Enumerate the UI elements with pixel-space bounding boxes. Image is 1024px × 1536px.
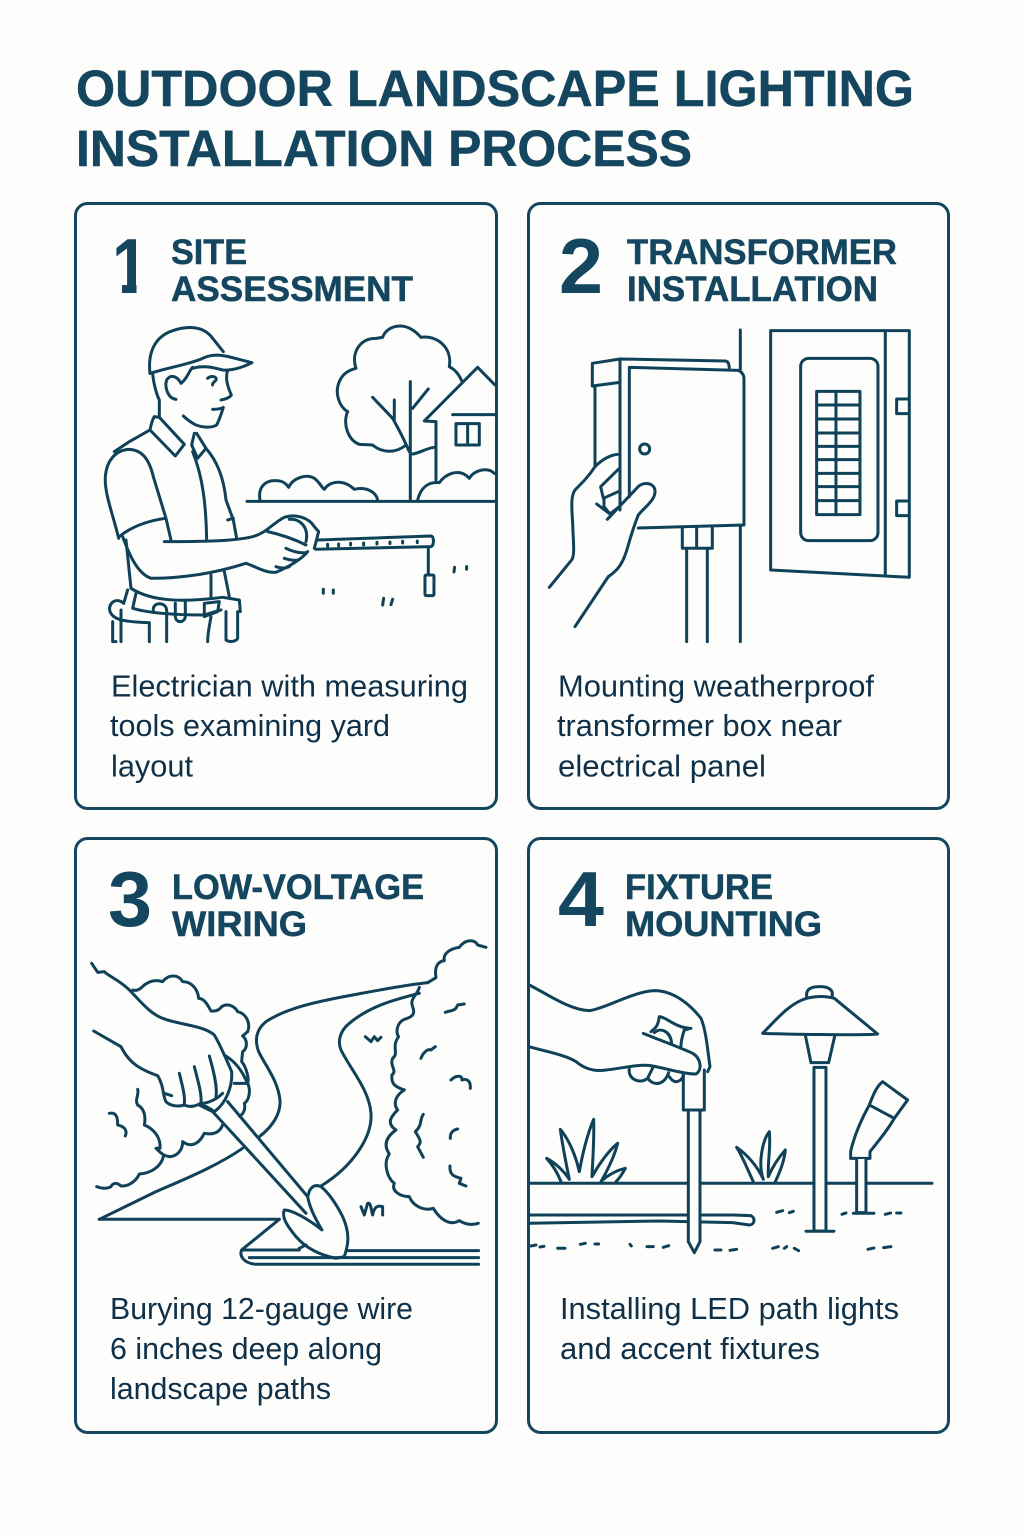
panel: step 3 low-voltage wiring (76, 838, 496, 1432)
description: step 3: 6 inches deep along (110, 1331, 382, 1366)
heading: transformer installation (627, 233, 897, 309)
description: step 1: layout (111, 748, 193, 784)
title: INSTALLATION PROCESS (76, 120, 692, 177)
description: step 3: Burying 12-gauge wire (110, 1291, 413, 1326)
heading: fixture mounting: FIXTURE (625, 868, 773, 907)
description: step 2 (557, 668, 874, 784)
step number 4: 4 (558, 855, 604, 943)
description: step 1: tools examining yard (110, 708, 390, 743)
description: step 4 (560, 1291, 899, 1366)
description: step 1 (110, 668, 468, 784)
panel: step 2 transformer installation (528, 204, 948, 808)
illustration: installing stake light (529, 985, 932, 1253)
step number 2: 2 (559, 222, 603, 310)
step number 3: 3 (108, 855, 152, 943)
illustration: mounting transformer box (549, 330, 909, 642)
description: step 3 (110, 1291, 413, 1406)
title: OUTDOOR LANDSCAPE LIGHTING (76, 60, 914, 117)
description: step 2: transformer box near (557, 708, 842, 743)
description: step 2: Mounting weatherproof (558, 668, 874, 704)
panel: step 4 fixture mounting (528, 838, 948, 1432)
description: step 2: electrical panel (558, 748, 766, 784)
illustration: burying wire with shovel (92, 941, 486, 1264)
panel: step 1 site assessment (76, 204, 496, 808)
description: step 1: Electrician with measuring (111, 668, 468, 704)
illustration: electrician measuring yard (105, 326, 495, 642)
heading: site assessment (171, 233, 413, 309)
step number 1: 1 (112, 222, 148, 310)
description: step 4: Installing LED path lights (560, 1291, 899, 1326)
heading: transformer installation: INSTALLATION (627, 270, 878, 309)
description: step 3: landscape paths (110, 1371, 331, 1406)
heading: low-voltage wiring: WIRING (172, 905, 307, 944)
heading: fixture mounting: MOUNTING (625, 905, 822, 944)
description: step 4: and accent fixtures (560, 1331, 820, 1366)
heading: site assessment: ASSESSMENT (171, 270, 413, 309)
heading: low-voltage wiring (172, 868, 424, 944)
heading: site assessment: SITE (171, 233, 247, 272)
heading: low-voltage wiring: LOW-VOLTAGE (172, 868, 424, 907)
heading: transformer installation: TRANSFORMER (627, 233, 897, 272)
title (76, 60, 914, 177)
heading: fixture mounting (625, 868, 822, 944)
